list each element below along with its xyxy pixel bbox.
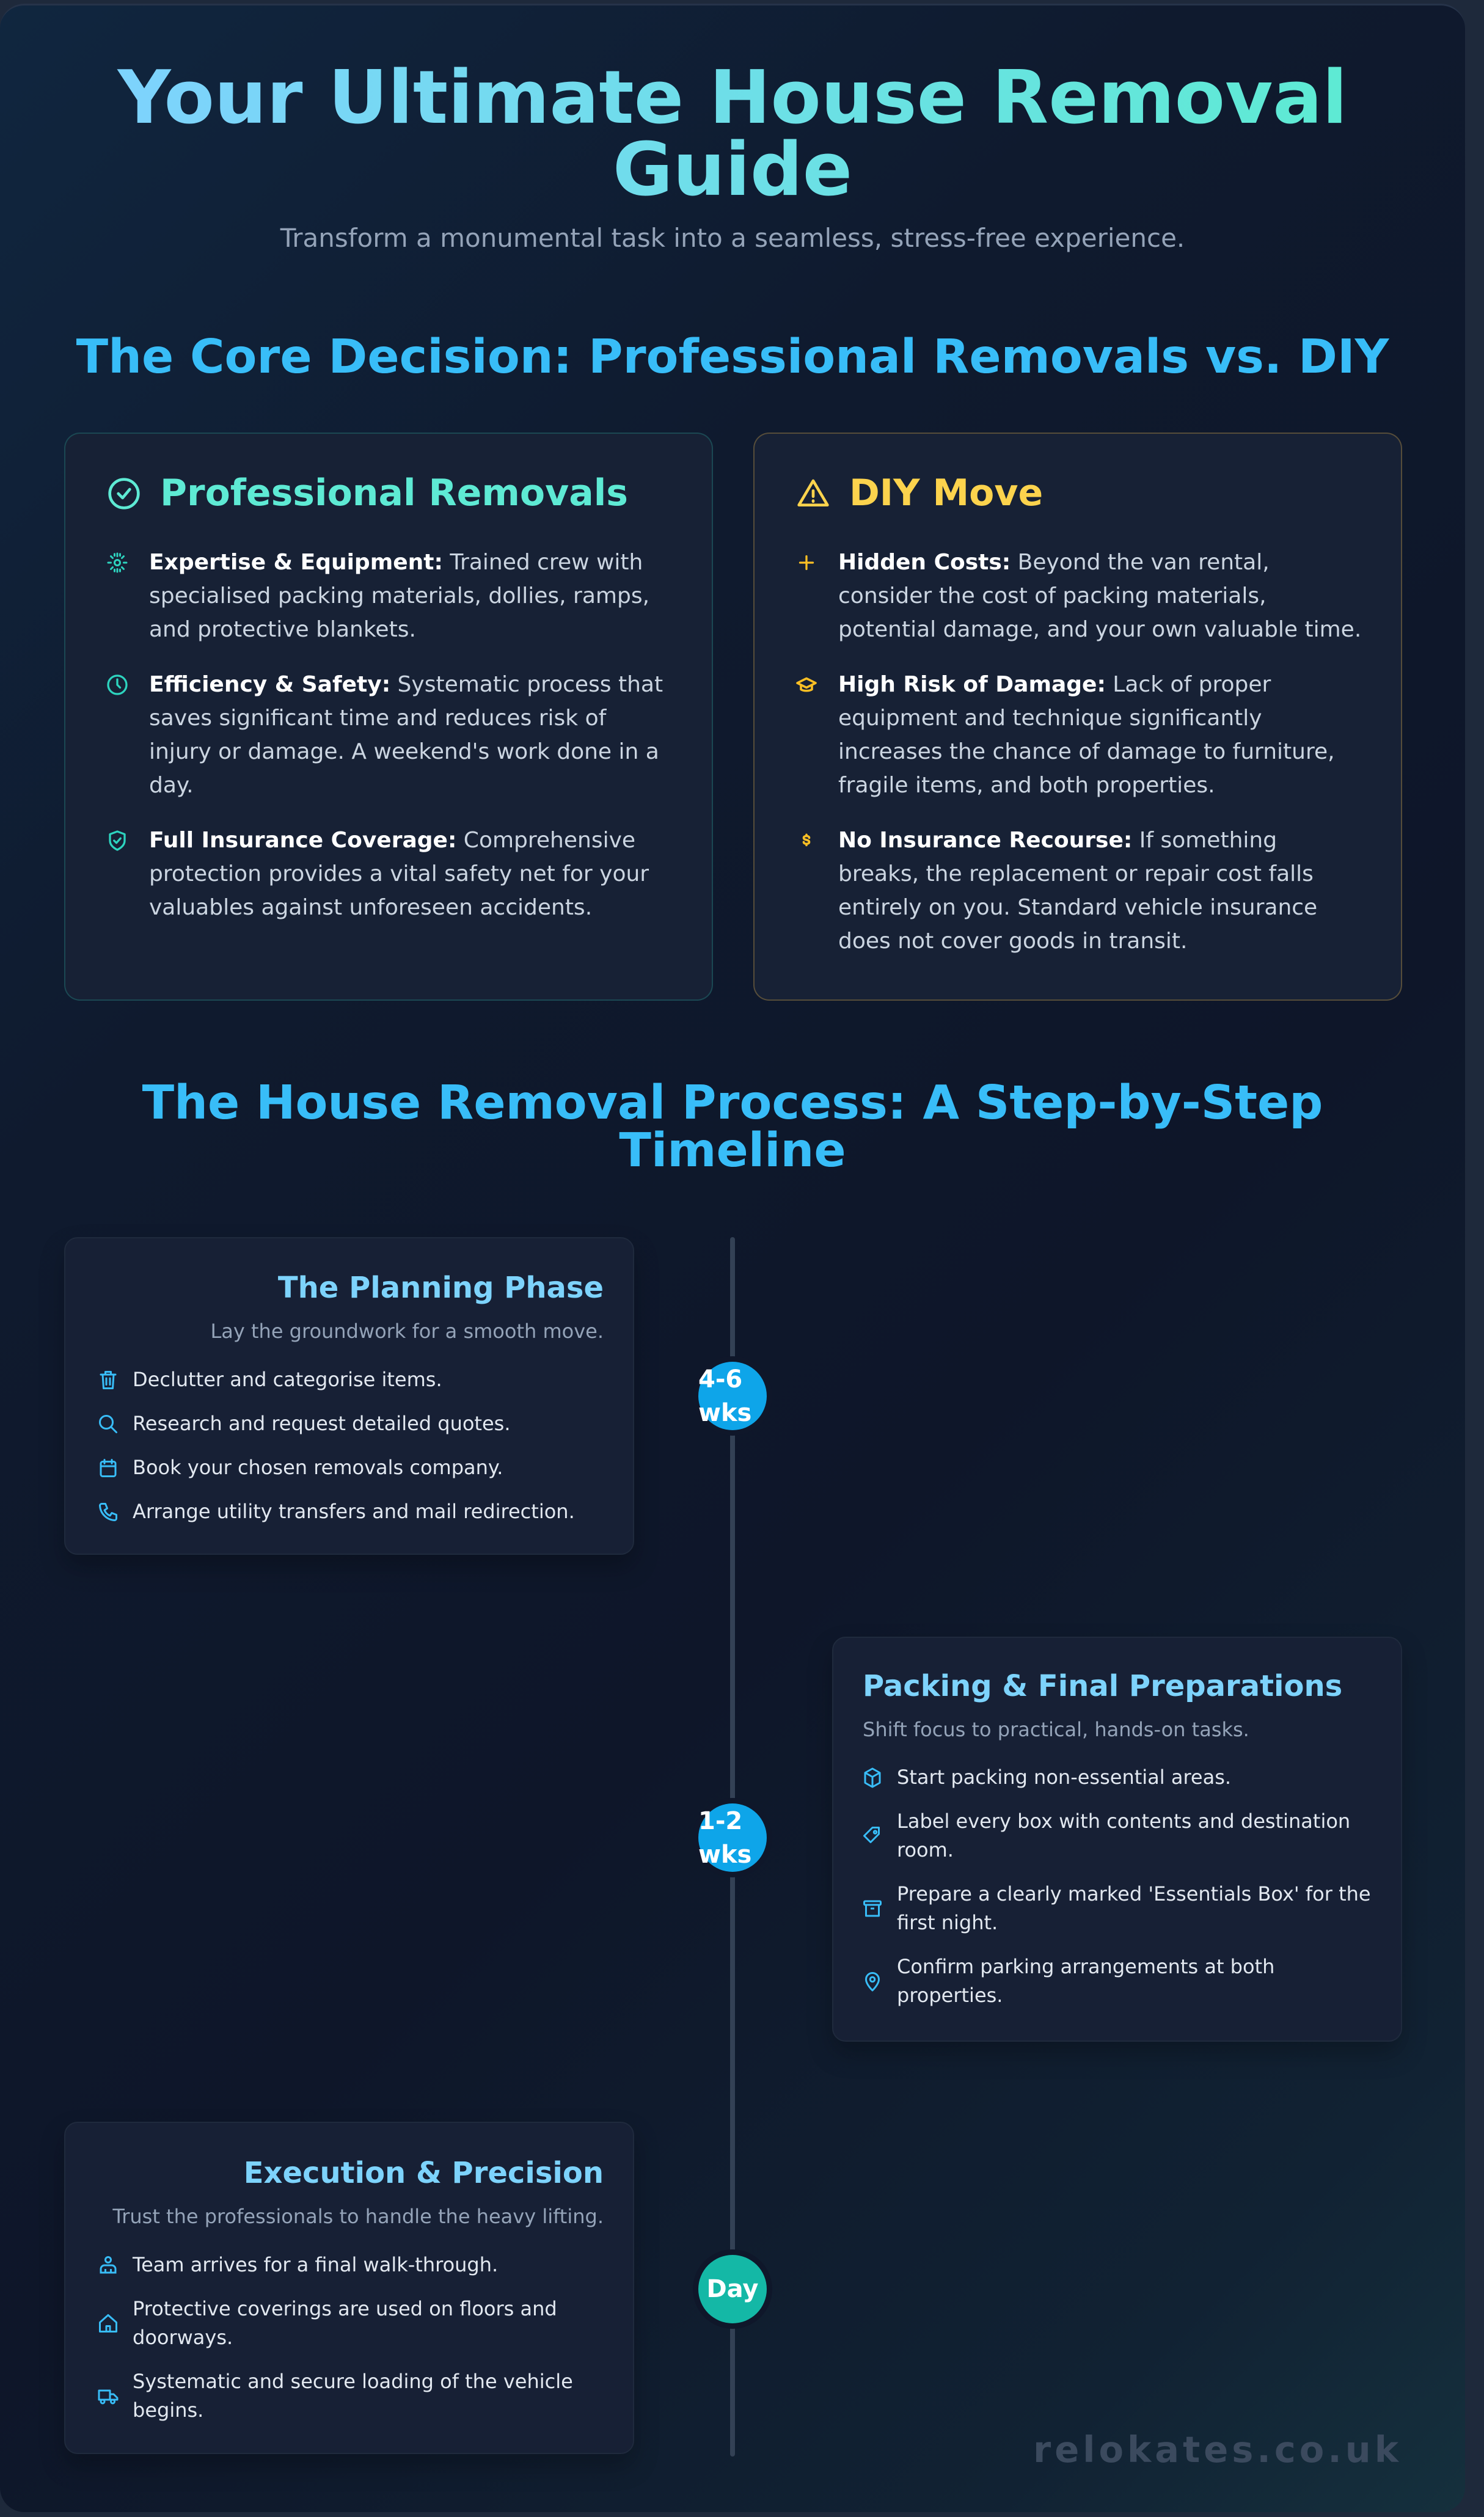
icon: check circle [108,478,140,510]
badge: 1-2 wks: 1-2 [698,1807,742,1835]
card subtitle: Shift focus to practical, hands-on tasks. [863,1718,1249,1741]
checklist: Start packing non-essential areas. [897,1766,1231,1789]
badge: 4-6 wks: wks [698,1399,751,1427]
subtitle: Transform a monumental task into a seamless, stress-free experience. [280,223,1185,253]
list: DIY risks: High Risk of Damage: Lack of proper equipment and technique significantly increases the chance of damage to furniture, fragile items, and both properties. [838,672,1335,798]
list: DIY risks: No Insurance Recourse: If something [838,828,1277,853]
card heading: Execution & Precision [244,2156,604,2190]
timeline card: packing [832,1637,1402,2042]
list: professional benefits: Efficiency & Safety: Systematic process that saves significant time and reduces risk of injury or damage. A weekend's work done in a day. [149,672,663,798]
panel: professional removals [64,433,713,1001]
badge: Day: Day [706,2275,759,2303]
heading: timeline: The House Removal Process: A Step-by-Step [142,1076,1323,1130]
card heading: Packing & Final Preparations [863,1669,1342,1703]
card subtitle: Trust the professionals to handle the heavy lifting. [112,2205,604,2228]
badge: 1-2 wks: wks [698,1841,751,1869]
timeline line [730,1237,735,2457]
list: DIY risks: Hidden Costs: Beyond the van rental, consider the cost of packing materials, potential damage, and your own valuable time. [838,550,1361,642]
checklist [99,1368,575,1523]
list: DIY risks: breaks, the replacement or repair cost falls entirely on you. Standard vehicle insurance does not cover goods in transit. [838,861,1317,954]
badge: Day [698,2255,767,2323]
checklist [863,1766,1371,2007]
checklist: Systematic and secure loading of the vehicle begins. [133,2370,573,2422]
watermark: relokates.co.uk [1033,2428,1402,2471]
checklist: Protective coverings are used on floors and doorways. [133,2297,557,2349]
icon: warning triangle [797,479,829,506]
checklist: Book your chosen removals company. [133,1456,503,1479]
checklist: Research and request detailed quotes. [133,1412,511,1435]
checklist: Declutter and categorise items. [133,1368,442,1391]
checklist: Label every box with contents and destination room. [897,1810,1350,1861]
heading: timeline: Timeline [619,1123,846,1178]
title: Guide [613,128,852,213]
timeline card: execution [64,2122,634,2454]
checklist: Prepare a clearly marked 'Essentials Box' for the first night. [897,1882,1371,1934]
list: DIY risks [796,550,1361,954]
card subtitle: Lay the groundwork for a smooth move. [210,1320,604,1343]
checklist: Confirm parking arrangements at both properties. [897,1955,1274,2007]
heading: timeline [142,1076,1323,1178]
title [0,62,1465,206]
list: professional benefits [107,550,663,920]
heading: core decision: The Core Decision: Professional Removals vs. DIY [76,330,1389,384]
list: professional benefits: Full Insurance Coverage: Comprehensive protection provides a vital safety net for your valuables against unforeseen accidents. [149,828,649,920]
card heading: The Planning Phase [278,1271,604,1305]
badge: 4-6 wks: 4-6 [698,1365,742,1394]
panel: DIY move [753,433,1402,1001]
timeline card: planning phase [64,1237,634,1555]
checklist: Team arrives for a final walk-through. [133,2253,498,2276]
list: professional benefits: Expertise & Equipment: Trained crew with specialised packing materials, dollies, ramps, and protective blankets. [149,550,649,642]
checklist [98,2253,573,2422]
badge: 1-2 wks [698,1803,767,1872]
heading: professional removals: Professional Removals [160,472,628,514]
heading: DIY move: DIY Move [849,472,1043,514]
title: Your Ultimate House Removal [118,56,1347,141]
checklist: Arrange utility transfers and mail redirection. [133,1500,575,1523]
badge: 4-6 wks [698,1362,767,1430]
